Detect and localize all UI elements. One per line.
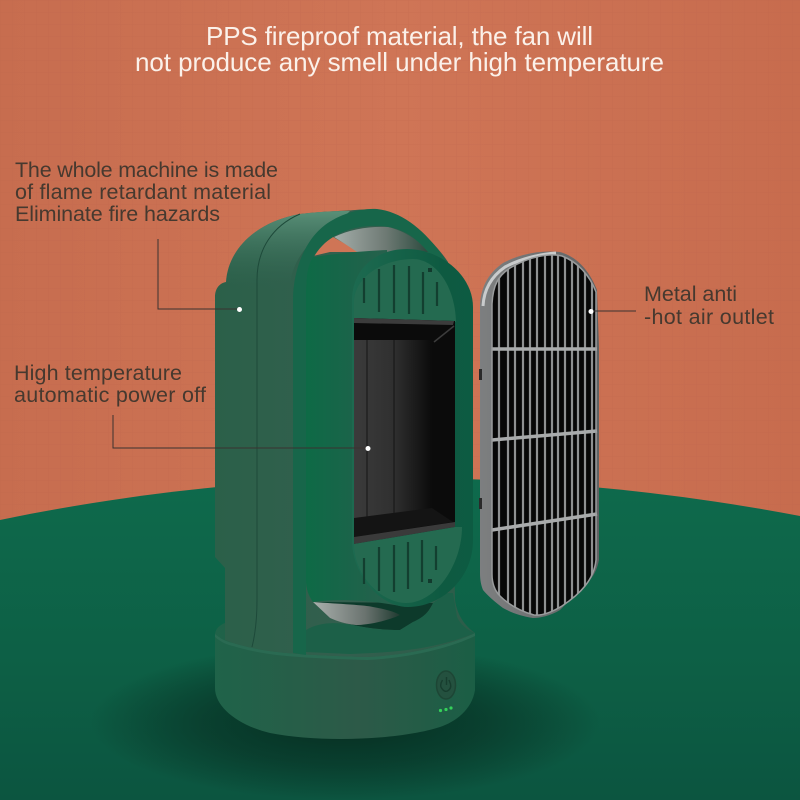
heater base (215, 623, 475, 739)
callout text: flame retardant: The whole machine is made (15, 158, 278, 182)
leader line: power off (113, 415, 368, 448)
front rim (352, 249, 473, 607)
power button (436, 671, 456, 699)
rear body shell (215, 209, 475, 657)
metal grille (479, 250, 599, 620)
callout: flame retardant (15, 158, 278, 312)
marker dot: flame retardant (237, 307, 242, 312)
marker dot: outlet (588, 309, 594, 314)
title: PPS fireproof material, the fan will (206, 21, 593, 51)
title: not produce any smell under high temperature (135, 47, 664, 77)
callout text: automatic power off: automatic power off (14, 383, 206, 407)
neck below front panel (306, 593, 475, 654)
callout text: flame retardant: of flame retardant material (15, 180, 271, 204)
lower ring opening (313, 602, 433, 630)
title (135, 21, 664, 77)
carrying ring opening (313, 227, 428, 256)
heating chamber (354, 318, 455, 544)
front panel side wall (306, 250, 400, 606)
upper vent face (354, 259, 456, 322)
callout text: hot air outlet (644, 282, 774, 329)
callout: automatic power off (14, 361, 370, 451)
ring front band (293, 209, 448, 655)
callout text: hot air outlet: Metal anti (644, 282, 737, 306)
callout text: flame retardant (15, 158, 278, 226)
green floor (0, 478, 800, 800)
leader line: outlet (591, 310, 636, 312)
callout text: flame retardant: Eliminate fire hazards (15, 202, 220, 226)
lower vent face (354, 527, 462, 603)
leader line: flame retardant (158, 239, 239, 309)
callout: hot air outlet (588, 282, 774, 329)
callout text: hot air outlet: -hot air outlet (644, 305, 774, 329)
marker dot: power off (366, 446, 370, 451)
indicator lights (439, 706, 453, 712)
callout text: automatic power off (14, 361, 206, 407)
callout text: automatic power off: High temperature (14, 361, 182, 385)
seam line (252, 214, 300, 647)
product: heater (215, 209, 475, 739)
